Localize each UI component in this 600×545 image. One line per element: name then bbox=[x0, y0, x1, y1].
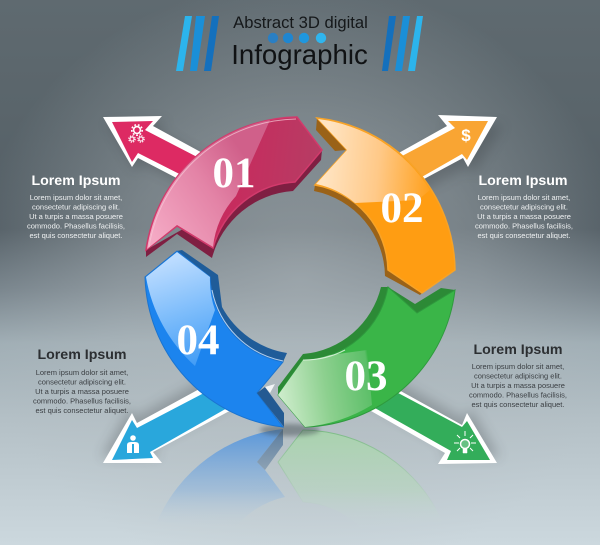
body bbox=[475, 193, 573, 240]
body: est quis consectetur aliquet. bbox=[472, 400, 564, 409]
body: est quis consectetur aliquet. bbox=[36, 406, 128, 415]
title line two: Infographic bbox=[231, 39, 368, 70]
gloss bbox=[146, 252, 215, 366]
reflection bbox=[157, 429, 443, 530]
face bbox=[315, 118, 455, 293]
body: consectetur adipiscing elit. bbox=[474, 372, 562, 380]
body: Lorem ipsum dolor sit amet, bbox=[30, 193, 122, 202]
text block: top right bbox=[475, 173, 573, 240]
arrow 4 blue bbox=[101, 369, 250, 463]
body: consectetur adipiscing elit. bbox=[480, 202, 568, 212]
arrow 2 orange bbox=[370, 115, 503, 208]
body: Lorem ipsum dolor sit amet, bbox=[472, 362, 564, 371]
right stripes bbox=[382, 16, 423, 71]
body: est quis consectetur aliquet. bbox=[30, 231, 122, 240]
body bbox=[27, 193, 125, 240]
icon: dollar: $ bbox=[461, 126, 471, 145]
number: 04 bbox=[176, 317, 220, 364]
text block: bottom left bbox=[33, 347, 131, 415]
body: commodo. Phasellus facilisis, bbox=[469, 390, 567, 400]
body: Lorem ipsum dolor sit amet, bbox=[478, 193, 570, 202]
body: Lorem ipsum dolor sit amet, bbox=[36, 368, 128, 377]
face bbox=[146, 117, 322, 250]
text block: top left bbox=[27, 173, 125, 240]
depth bbox=[146, 150, 322, 258]
body: commodo. Phasellus facilisis, bbox=[33, 396, 131, 406]
depth bbox=[316, 118, 347, 151]
inner rim bbox=[303, 350, 345, 360]
title block bbox=[176, 13, 423, 71]
heading: Lorem Ipsum bbox=[31, 173, 121, 189]
notch side bbox=[257, 387, 284, 427]
gloss bbox=[147, 120, 270, 249]
body bbox=[469, 362, 567, 409]
body: commodo. Phasellus facilisis, bbox=[27, 222, 125, 230]
body bbox=[33, 368, 131, 415]
number: 01 bbox=[212, 150, 256, 197]
body: consectetur adipiscing elit. bbox=[32, 202, 120, 212]
icon: gears bbox=[129, 125, 144, 142]
text block: bottom right bbox=[469, 342, 567, 409]
body: Ut a turpis a massa posuere bbox=[477, 212, 571, 221]
blue reflection bbox=[157, 429, 285, 530]
contact shadow bbox=[260, 424, 320, 436]
body: Ut a turpis a massa posuere bbox=[471, 381, 565, 390]
number: 02 bbox=[380, 185, 424, 232]
body: Ut a turpis a massa posuere bbox=[35, 387, 129, 396]
inner rim bbox=[212, 290, 283, 361]
segment 01 pink bbox=[146, 117, 322, 258]
title dots bbox=[268, 33, 326, 43]
arrow 3 green bbox=[350, 368, 500, 464]
body: Ut a turpis a massa posuere bbox=[29, 212, 123, 221]
depth bbox=[278, 287, 455, 400]
green reflection bbox=[278, 430, 443, 530]
segment 03 green bbox=[278, 287, 455, 427]
body: consectetur adipiscing elit. bbox=[38, 378, 126, 386]
heading: Lorem Ipsum bbox=[473, 342, 563, 358]
icon: person bbox=[127, 435, 139, 453]
gloss bbox=[278, 350, 372, 427]
title line one: Abstract 3D digital bbox=[233, 13, 368, 32]
heading: Lorem Ipsum bbox=[478, 173, 568, 189]
body: commodo. Phasellus facilisis, bbox=[475, 222, 573, 230]
outer rim bbox=[149, 119, 296, 247]
left stripes bbox=[176, 16, 219, 71]
depth bbox=[177, 250, 287, 362]
arrow 1 pink bbox=[103, 116, 234, 203]
body: est quis consectetur aliquet. bbox=[478, 231, 570, 240]
heading: Lorem Ipsum bbox=[37, 347, 127, 363]
face bbox=[278, 287, 455, 427]
gloss bbox=[316, 119, 430, 203]
number: 03 bbox=[344, 353, 388, 400]
segment 02 orange bbox=[314, 118, 455, 295]
icon: light bulb bbox=[454, 431, 476, 453]
segment 04 blue bbox=[145, 250, 287, 427]
face bbox=[145, 251, 283, 427]
